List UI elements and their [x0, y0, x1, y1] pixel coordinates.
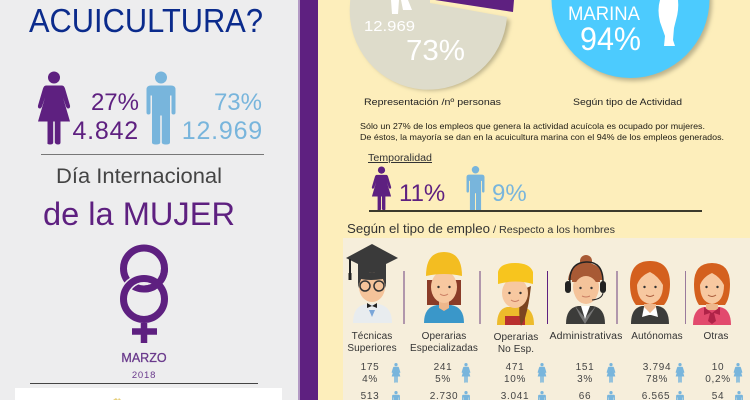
- employment category labels: Otras: [704, 331, 728, 342]
- employment category labels: Técnicas: [352, 331, 392, 342]
- pie chart: representation: [350, 0, 514, 90]
- men count: 12.969: [182, 117, 263, 145]
- women counts and shares: 5%: [435, 374, 451, 385]
- icon: woman: [38, 72, 70, 144]
- small woman icons: [392, 363, 742, 383]
- caption: activity type: Según tipo de Actividad: [573, 97, 682, 108]
- left panel background: [0, 0, 298, 400]
- employment category labels: Superiores: [347, 343, 397, 354]
- men temporality: 9%: [492, 180, 527, 207]
- men percentage: 73%: [214, 89, 262, 116]
- women counts and shares: 3.794: [643, 362, 671, 373]
- icon: white figure: [391, 0, 412, 14]
- employment category labels: Operarias: [494, 332, 538, 343]
- purple vertical band: [300, 0, 318, 400]
- women counts and shares: 471: [506, 362, 524, 373]
- character: non-specialised worker: [497, 263, 534, 326]
- employment category labels: [347, 331, 728, 355]
- women counts and shares: 10%: [504, 374, 526, 385]
- character: specialised worker: [424, 252, 464, 323]
- label: MARINA: MARINA: [568, 4, 640, 25]
- women counts and shares: 0,2%: [705, 374, 731, 385]
- character: administrative: [565, 255, 606, 324]
- explanatory paragraph: Sólo un 27% de los empleos que genera la actividad acuícola es ocupado por mujeres.: [360, 121, 705, 131]
- men statistic: [146, 72, 263, 145]
- date: MARZO: MARZO: [121, 351, 167, 365]
- women counts and shares: 10: [712, 362, 724, 373]
- blue circle: activity type: [552, 0, 712, 81]
- heading: employment type: Según el tipo de empleo: [347, 222, 490, 236]
- character: self-employed: [630, 261, 670, 324]
- small man icons: [392, 391, 743, 400]
- women percentage: 27%: [91, 89, 139, 116]
- women counts and shares: 3%: [577, 374, 593, 385]
- icon: 8 March female symbol: [124, 248, 164, 343]
- date: 2018: 2018: [132, 370, 156, 381]
- men counts: [361, 391, 724, 400]
- heading: de la MUJER: de la MUJER: [43, 196, 235, 232]
- employment table background: [343, 238, 750, 400]
- icon: man: [146, 72, 176, 144]
- women counts and shares: [361, 362, 731, 385]
- white logo box: [15, 388, 282, 400]
- explanatory paragraph: [360, 121, 724, 142]
- employment category labels: No Esp.: [498, 344, 534, 355]
- heading: employment type: [347, 222, 615, 236]
- women counts and shares: 4%: [362, 374, 378, 385]
- title: ACUICULTURA?: [29, 2, 263, 39]
- percentage: 94%: 94%: [580, 21, 641, 57]
- heading: Día Internacional: Día Internacional: [56, 165, 222, 188]
- heading: employment type: / Respecto a los hombres: [493, 225, 615, 236]
- purple slice: [435, 0, 514, 12]
- icon: white woman silhouette: [658, 0, 678, 46]
- women counts and shares: 151: [576, 362, 594, 373]
- explanatory paragraph: De éstos, la mayoría se dan en la acuicultura marina con el 94% de los empleos generados.: [360, 132, 724, 142]
- icon: woman: [372, 166, 391, 210]
- label: Temporalidad: Temporalidad: [368, 153, 432, 164]
- pie percentage: 73%: [406, 35, 465, 67]
- women count: 4.842: [72, 117, 139, 145]
- character: others: [693, 263, 731, 325]
- temporality chart: [368, 153, 702, 212]
- employment category labels: Operarias: [422, 331, 466, 342]
- caption: representation: Representación /nº personas: [364, 97, 501, 108]
- pie count: 12.969: [364, 18, 415, 35]
- women statistic: [38, 72, 139, 145]
- women counts and shares: 241: [434, 362, 452, 373]
- icon: man: [467, 166, 484, 211]
- women counts and shares: 175: [361, 362, 379, 373]
- women counts and shares: 78%: [646, 374, 668, 385]
- employment category labels: Especializadas: [410, 343, 478, 354]
- employment category labels: Autónomas: [631, 331, 683, 342]
- women temporality: 11%: [399, 180, 445, 207]
- character: technician: [346, 244, 398, 323]
- employment category labels: Administrativas: [550, 331, 622, 342]
